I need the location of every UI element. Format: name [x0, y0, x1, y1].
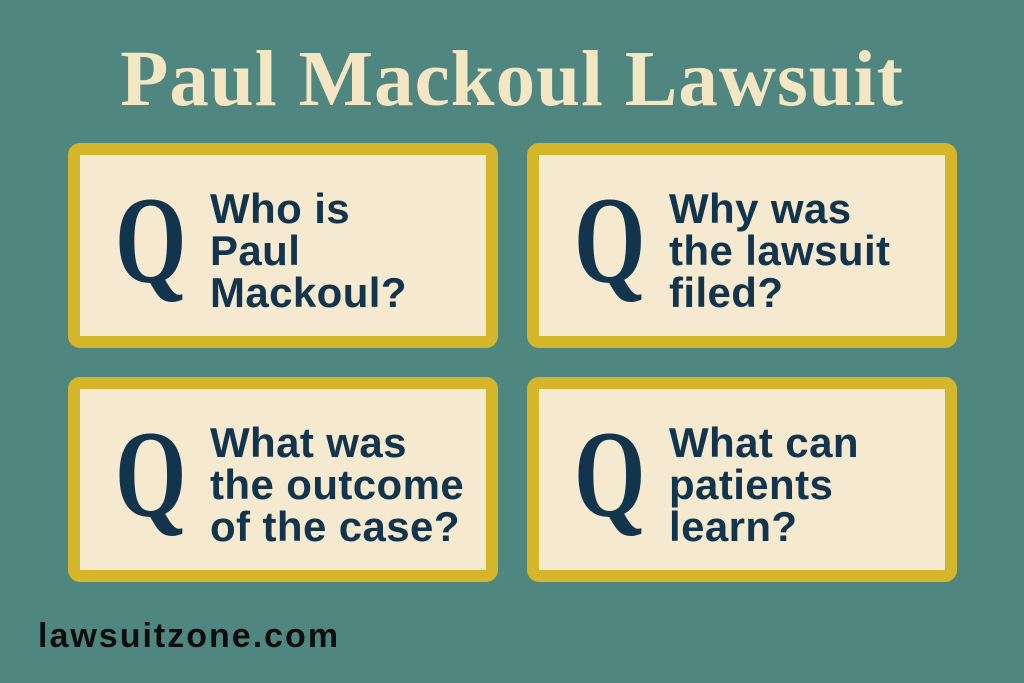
panel: why was the lawsuit filed	[527, 143, 957, 348]
footer: website: lawsuitzone.com	[38, 617, 340, 655]
question text: of the case?	[210, 503, 460, 550]
icon: Q letter: Q	[574, 172, 645, 309]
question text: the lawsuit	[669, 227, 890, 274]
question text: Who is	[210, 185, 350, 232]
icon: Q letter: Q	[115, 172, 186, 309]
icon: Q letter: Q	[115, 406, 186, 543]
question text: What was	[210, 419, 407, 466]
panel: outcome of the case	[68, 377, 498, 582]
icon: Q letter: Q	[574, 406, 645, 543]
question text	[210, 419, 464, 550]
title: Paul Mackoul Lawsuit	[120, 36, 904, 123]
question text: Paul	[210, 227, 300, 274]
question text: Why was	[669, 185, 852, 232]
question text	[669, 419, 859, 550]
panel: who is Paul Mackoul	[68, 143, 498, 348]
question text: What can	[669, 419, 859, 466]
panel: what can patients learn	[527, 377, 957, 582]
question text	[669, 185, 890, 316]
question text	[210, 185, 407, 316]
question text: the outcome	[210, 461, 464, 508]
question text: patients	[669, 461, 833, 508]
question text: Mackoul?	[210, 269, 407, 316]
question text: filed?	[669, 269, 783, 316]
question text: learn?	[669, 503, 797, 550]
